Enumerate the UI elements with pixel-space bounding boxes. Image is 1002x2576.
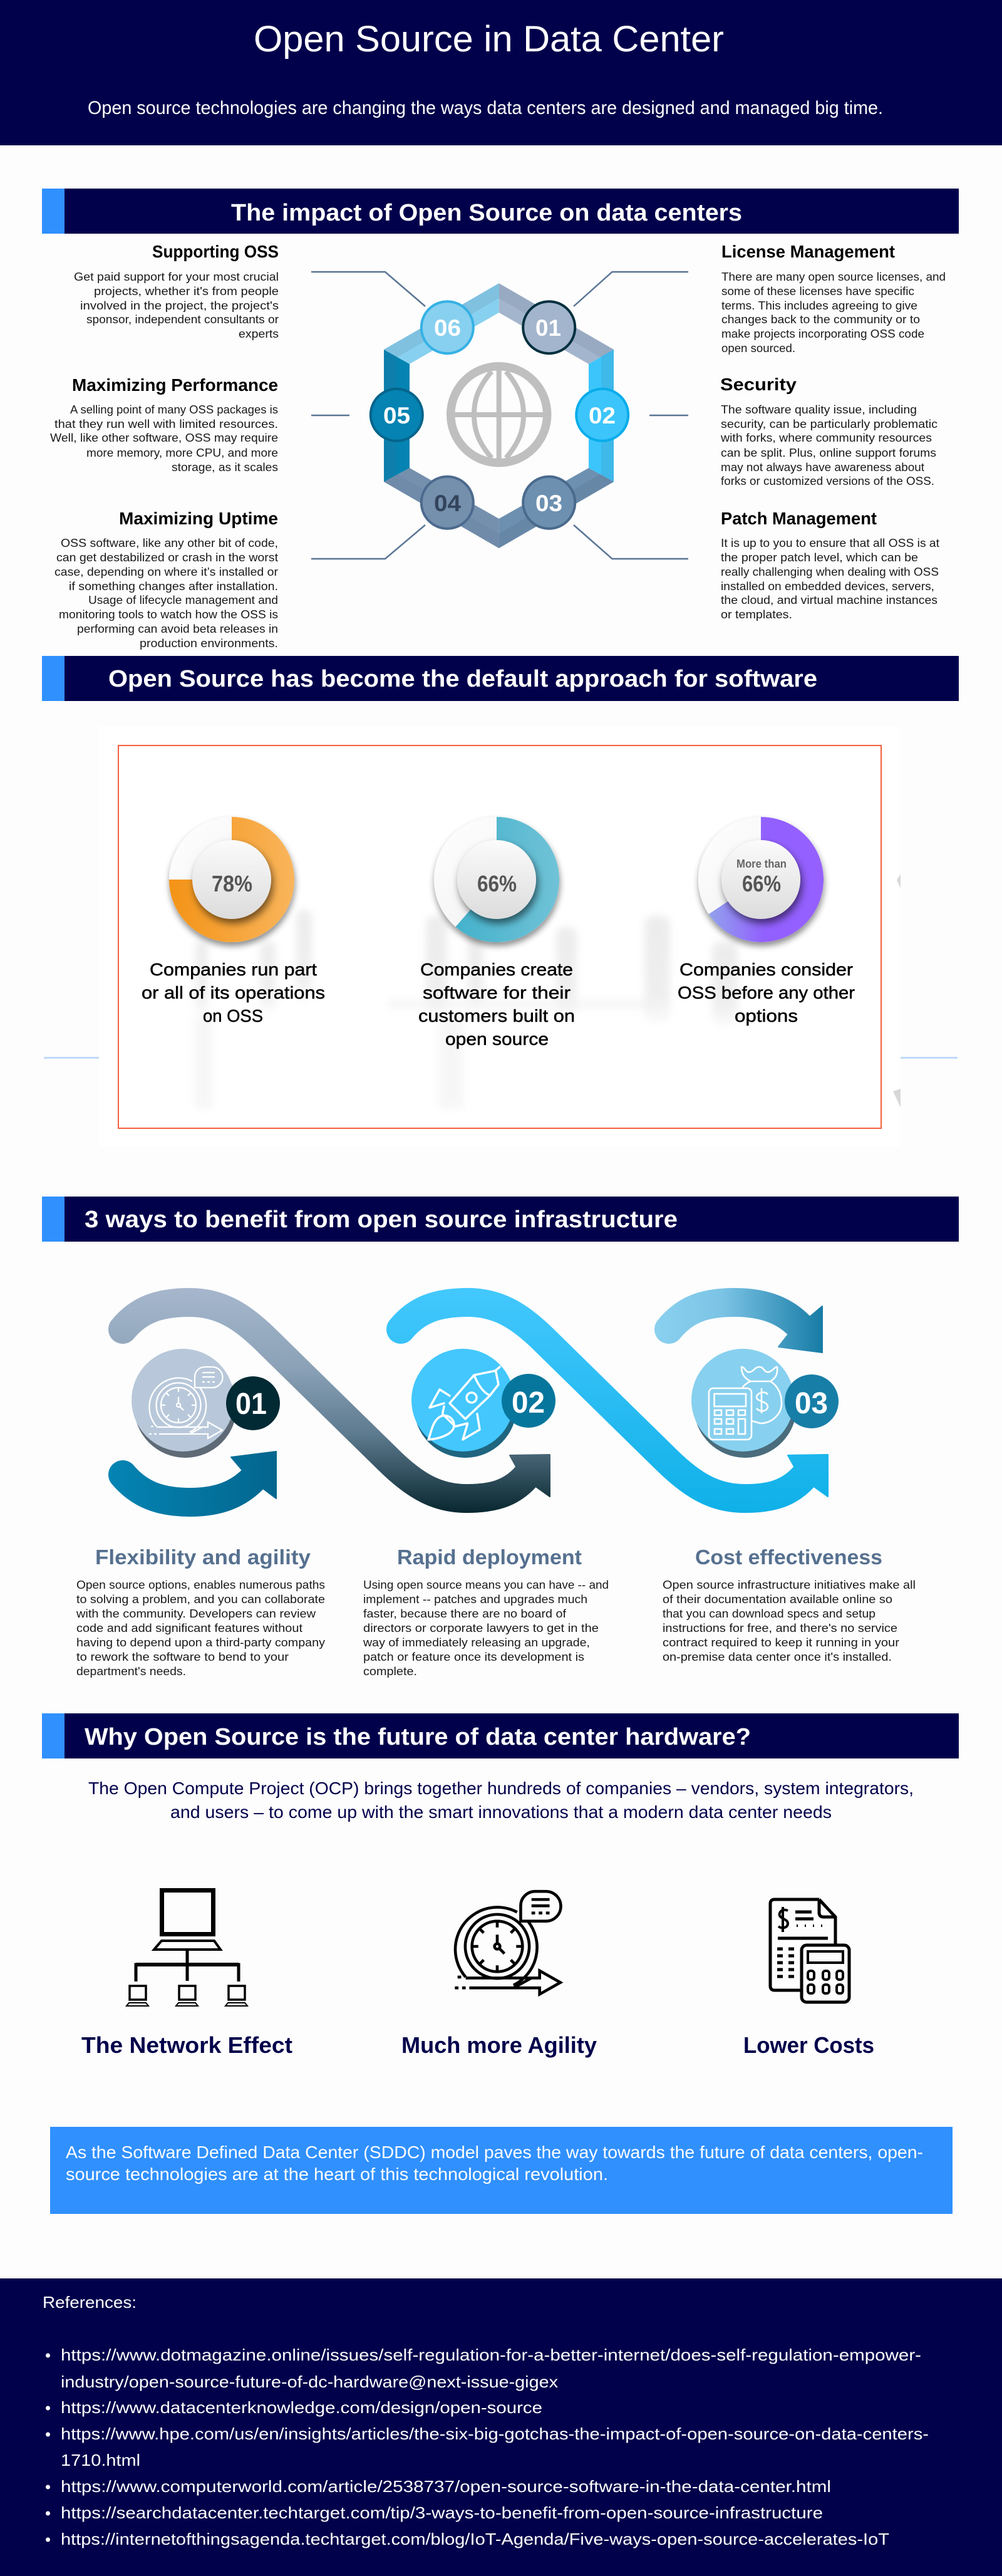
text block: Maximizing Uptime: can get destabilized or crash in the worst xyxy=(56,551,278,564)
background photo: faded crowd xyxy=(99,727,901,1146)
arrow: upper light ribbon xyxy=(669,1302,822,1353)
hexagon segment 05 xyxy=(384,350,410,482)
text block: Supporting OSS: Get paid support for your most crucial xyxy=(74,271,279,283)
text block: Maximizing Uptime xyxy=(54,509,278,650)
text block: Patch Management: or templates. xyxy=(721,608,792,621)
step 01 disc xyxy=(132,1349,237,1458)
chart: ribbon flow xyxy=(123,1302,839,1502)
text block: Rapid deployment: faster, because there are no board of xyxy=(363,1607,567,1620)
text block: Open Compute Project intro xyxy=(88,1779,914,1822)
label: 78% xyxy=(142,960,325,1026)
reference list: https://internetofthingsagenda.techtarget.com/blog/IoT-Agenda/Five-ways-open-source-accelerates-IoT xyxy=(61,2530,889,2548)
text block: Rapid deployment: implement -- patches and upgrades much xyxy=(363,1593,587,1606)
title: Open Source in Data Center xyxy=(254,19,724,60)
reference list: https://www.dotmagazine.online/issues/self-regulation-for-a-better-internet/does-self-regulation-empower- xyxy=(61,2345,921,2364)
subtitle: Open source technologies are changing the ways data centers are designed and managed big time. xyxy=(88,98,883,118)
panel: statistics xyxy=(99,727,901,1146)
section banner: hardware future: Why Open Source is the future of data center hardware? xyxy=(85,1724,751,1750)
label: Lower Costs: Lower Costs xyxy=(743,2032,874,2058)
section banner: impact: The impact of Open Source on data centers xyxy=(231,200,742,226)
text block: Maximizing Performance: Well, like other software, OSS may require xyxy=(50,432,278,444)
text block: Maximizing Performance: that they run well with limited resources. xyxy=(54,418,278,430)
text block: Maximizing Uptime: Usage of lifecycle management and xyxy=(88,594,278,606)
text block: Patch Management: really challenging when dealing with OSS xyxy=(721,566,939,578)
badge 04 xyxy=(421,477,473,529)
footer: references xyxy=(0,2278,1002,2576)
text block: Rapid deployment: Using open source means you can have -- and xyxy=(363,1579,609,1591)
text block: Maximizing Uptime: case, depending on where it’s installed or xyxy=(54,566,278,578)
text block: License Management: make projects incorporating OSS code xyxy=(721,328,924,340)
reference list: https://www.computerworld.com/article/2538737/open-source-software-in-the-data-center.html xyxy=(61,2477,831,2496)
text block: Supporting OSS xyxy=(74,242,279,340)
step 02 disc xyxy=(411,1349,517,1458)
text block: Flexibility and agility: having to depend upon a third-party company xyxy=(76,1636,325,1649)
text block: Flexibility and agility: Flexibility and agility xyxy=(95,1545,311,1569)
text block: Cost effectiveness: Open source infrastructure initiatives make all xyxy=(663,1579,916,1591)
text block: License Management xyxy=(721,242,946,355)
text block: Maximizing Uptime: Maximizing Uptime xyxy=(119,509,278,528)
chart: hexagon diagram xyxy=(311,272,688,559)
text block: Cost effectiveness: instructions for free, and there's no service xyxy=(663,1622,897,1634)
label: more than 66%: options xyxy=(735,1006,798,1026)
text block: Security: forks or customized versions of the OSS. xyxy=(721,475,934,487)
header band xyxy=(0,0,1002,145)
label: 78%: Companies run part xyxy=(150,960,317,979)
step 02 number: 02 xyxy=(512,1386,545,1420)
arrow: lower teal ribbon xyxy=(123,1452,276,1502)
text block: Flexibility and agility: code and add significant features without xyxy=(76,1622,302,1634)
callout: source technologies are at the heart of this technological revolution. xyxy=(66,2164,608,2184)
text block: Cost effectiveness: that you can download specs and setup xyxy=(663,1607,875,1620)
text block: Flexibility and agility: to rework the software to bend to your xyxy=(76,1651,289,1663)
donut: 78%: 78% xyxy=(212,871,252,896)
hexagon segment 01 xyxy=(499,283,614,364)
text block: Rapid deployment: way of immediately releasing an upgrade, xyxy=(363,1636,590,1649)
text block: License Management: License Management xyxy=(721,242,895,261)
text block: Cost effectiveness: on-premise data center once it's installed. xyxy=(663,1651,892,1663)
label: more than 66%: Companies consider xyxy=(679,960,853,979)
text block: Rapid deployment: Rapid deployment xyxy=(397,1545,582,1569)
icon: calculator and money bag xyxy=(709,1367,782,1440)
text block: Cost effectiveness: contract required to keep it running in your xyxy=(663,1636,899,1649)
label: 66% xyxy=(418,960,575,1049)
badge 02: 02 xyxy=(589,403,616,428)
badge 01 xyxy=(523,301,575,353)
step 03 number: 03 xyxy=(795,1387,828,1420)
badge 04: 04 xyxy=(434,491,461,516)
text block: Maximizing Performance: Maximizing Performance xyxy=(72,375,278,395)
text block: Security: The software quality issue, including xyxy=(721,403,917,416)
hexagon segment 03 xyxy=(499,468,614,548)
text block: Rapid deployment: complete. xyxy=(363,1665,417,1678)
section banner: impact xyxy=(42,189,959,234)
text block: Maximizing Performance: storage, as it scales xyxy=(172,461,278,474)
text block: Supporting OSS: experts xyxy=(239,328,279,340)
step 02 number xyxy=(502,1374,555,1428)
badge 02 xyxy=(576,389,628,441)
label: 66%: open source xyxy=(445,1029,549,1049)
references heading: References: xyxy=(43,2293,137,2312)
text block: Maximizing Performance xyxy=(50,375,278,474)
text block: Patch Management: installed on embedded devices, servers, xyxy=(721,580,934,593)
text block: Open Compute Project intro: The Open Compute Project (OCP) brings together hundreds of companies – vendors, system integrators, xyxy=(88,1779,914,1798)
badge 06: 06 xyxy=(434,315,461,341)
donut: more than 66% xyxy=(698,817,824,942)
hexagon segment 06 xyxy=(384,283,499,364)
donut: more than 66%: 66% xyxy=(742,871,781,896)
text block: Cost effectiveness: of their documentation available online so xyxy=(663,1593,892,1606)
text block: Maximizing Uptime: OSS software, like any other bit of code, xyxy=(61,537,278,549)
icon: invoice and calculator xyxy=(770,1899,849,2002)
section banner: three ways: 3 ways to benefit from open source infrastructure xyxy=(85,1207,678,1233)
faint side rules xyxy=(44,1057,958,1059)
label: 78%: or all of its operations xyxy=(142,983,325,1002)
reference list: industry/open-source-future-of-dc-hardware@next-issue-gigex xyxy=(61,2372,558,2391)
callout xyxy=(50,2127,953,2214)
label: more than 66%: OSS before any other xyxy=(678,983,855,1002)
text block: Supporting OSS: Supporting OSS xyxy=(152,242,279,261)
label: more than 66% xyxy=(678,960,855,1026)
icon: rocket xyxy=(428,1367,500,1440)
connector lines xyxy=(311,272,688,559)
text block: License Management: terms. This includes agreeing to give xyxy=(721,299,917,312)
icon: agility xyxy=(455,1891,561,1994)
arrow: grey to dark ribbon xyxy=(123,1302,550,1498)
text block: Open Compute Project intro: and users – to come up with the smart innovations that a modern data center needs xyxy=(170,1802,832,1822)
badge 05 xyxy=(371,389,423,441)
donut: 66%: 66% xyxy=(477,871,517,896)
donut: 78% xyxy=(169,817,294,942)
text block: License Management: some of these licenses have specific xyxy=(721,285,914,298)
text block: License Management: changes back to the community or to xyxy=(721,313,920,326)
badge 03: 03 xyxy=(535,491,562,516)
hexagon segment 02 xyxy=(589,350,614,482)
text block: Rapid deployment: directors or corporate lawyers to get in the xyxy=(363,1622,599,1634)
text block: Patch Management: the proper patch level, which can be xyxy=(721,551,918,564)
text block: Patch Management: It is up to you to ensure that all OSS is at xyxy=(721,537,939,549)
text block: Flexibility and agility: department's needs. xyxy=(76,1665,186,1678)
text block: Flexibility and agility: Open source options, enables numerous paths xyxy=(76,1579,325,1591)
text block: Supporting OSS: sponsor, independent consultants or xyxy=(86,313,279,326)
badge 05: 05 xyxy=(383,403,410,428)
section banner: default approach xyxy=(42,656,959,701)
text block: Patch Management: Patch Management xyxy=(721,509,877,528)
reference list: https://searchdatacenter.techtarget.com/tip/3-ways-to-benefit-from-open-source-infrastructure xyxy=(61,2503,823,2522)
arrow: bright blue ribbon xyxy=(401,1302,828,1498)
label: The Network Effect: The Network Effect xyxy=(81,2032,292,2058)
text block: Patch Management: the cloud, and virtual machine instances xyxy=(721,594,937,606)
reference list xyxy=(46,2345,929,2548)
text block: Maximizing Uptime: performing can avoid beta releases in xyxy=(77,623,278,635)
reference list: https://www.hpe.com/us/en/insights/articles/the-six-big-gotchas-the-impact-of-open-source-on-data-centers- xyxy=(61,2424,929,2443)
text block: Security: may not always have awareness about xyxy=(721,461,924,474)
text block: Rapid deployment xyxy=(363,1545,609,1678)
step 01 number xyxy=(226,1376,280,1430)
donut: 66% xyxy=(434,817,559,942)
section banner: hardware future xyxy=(42,1713,959,1758)
badge 03 xyxy=(523,477,575,529)
icon: network xyxy=(127,1891,247,2006)
reference list: https://www.datacenterknowledge.com/design/open-source xyxy=(61,2398,542,2417)
label: 78%: on OSS xyxy=(203,1006,263,1026)
text block: Maximizing Performance: more memory, more CPU, and more xyxy=(86,447,278,459)
text block: License Management: There are many open source licenses, and xyxy=(721,271,946,283)
text block: Maximizing Uptime: monitoring tools to watch how the OSS is xyxy=(59,608,278,621)
section banner: three ways xyxy=(42,1197,959,1242)
badge 06 xyxy=(421,301,473,353)
step 03 disc xyxy=(691,1349,797,1458)
text block: Patch Management xyxy=(721,509,939,621)
step 03 number xyxy=(785,1374,839,1428)
hexagon segment 04 xyxy=(384,468,499,548)
icon: globe xyxy=(451,366,547,463)
text block: Supporting OSS: involved in the project, the project's xyxy=(80,299,279,312)
text block: Security: Security xyxy=(720,375,797,394)
text block: Cost effectiveness xyxy=(663,1545,916,1663)
label: Much more Agility: Much more Agility xyxy=(401,2032,597,2058)
donut: more than 66%: More than xyxy=(736,858,787,870)
label: 66%: customers built on xyxy=(418,1006,575,1026)
text block: Security: with forks, where community resources xyxy=(720,432,932,444)
text block: Flexibility and agility: to solving a problem, and you can collaborate xyxy=(76,1593,325,1606)
badge 01: 01 xyxy=(535,315,561,341)
callout: As the Software Defined Data Center (SDDC) model paves the way towards the future of data centers, open- xyxy=(66,2142,923,2162)
section banner: default approach: Open Source has become the default approach for software xyxy=(108,666,817,692)
reference list: 1710.html xyxy=(61,2451,140,2470)
text block: Supporting OSS: projects, whether it's from people xyxy=(94,285,279,298)
text block: Maximizing Uptime: if something changes after installation. xyxy=(69,580,278,593)
text block: License Management: open sourced. xyxy=(721,342,795,355)
frame xyxy=(118,745,881,1128)
step 01 number: 01 xyxy=(235,1388,267,1421)
icon: clock agility xyxy=(149,1367,223,1438)
text block: Security: security, can be particularly problematic xyxy=(721,418,937,430)
text block: Flexibility and agility: with the community. Developers can review xyxy=(76,1607,316,1620)
label: 66%: software for their xyxy=(423,983,571,1002)
text block: Security: can be split. Plus, online support forums xyxy=(721,447,936,459)
text block: Security xyxy=(720,375,937,487)
text block: Flexibility and agility xyxy=(76,1545,325,1678)
text block: Maximizing Performance: A selling point of many OSS packages is xyxy=(70,403,278,416)
text block: Maximizing Uptime: production environments. xyxy=(140,637,278,650)
text block: Cost effectiveness: Cost effectiveness xyxy=(695,1545,882,1569)
label: 66%: Companies create xyxy=(420,960,573,979)
text block: Rapid deployment: patch or feature once its development is xyxy=(363,1651,584,1663)
